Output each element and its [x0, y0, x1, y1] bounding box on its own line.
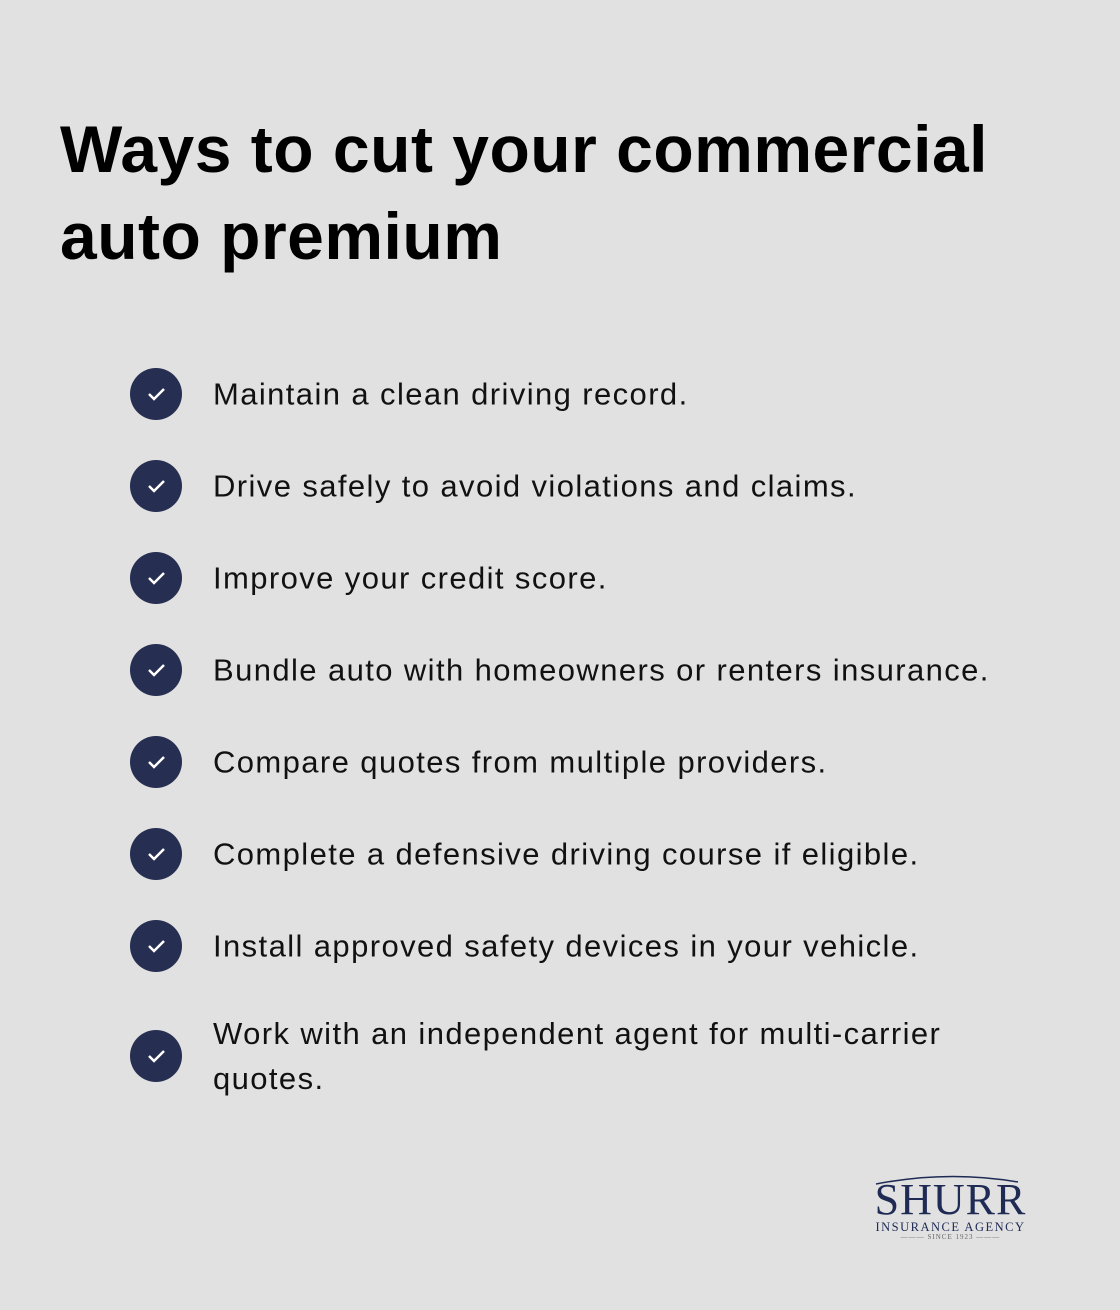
item 4 [130, 644, 990, 696]
item 1: Maintain a clean driving record. [213, 376, 689, 412]
logo: SHURR [875, 1175, 1026, 1224]
item 8 [130, 1016, 941, 1096]
item 2: Drive safely to avoid violations and claims. [213, 468, 857, 504]
item 6 [130, 828, 919, 880]
logo: ——— SINCE 1923 ——— [901, 1233, 1000, 1241]
item 5 [130, 736, 828, 788]
item 4: Bundle auto with homeowners or renters insurance. [213, 652, 990, 688]
title: Ways to cut your commercial [60, 112, 988, 186]
item 8: Work with an independent agent for multi-carrier [213, 1016, 941, 1051]
item 5: Compare quotes from multiple providers. [213, 744, 828, 780]
title: auto premium [60, 199, 502, 273]
item 7: Install approved safety devices in your vehicle. [213, 928, 919, 964]
item 7 [130, 920, 919, 972]
item 6: Complete a defensive driving course if eligible. [213, 836, 919, 872]
logo: INSURANCE AGENCY [875, 1220, 1026, 1234]
item 3: Improve your credit score. [213, 560, 608, 596]
item 3 [130, 552, 608, 604]
item 2 [130, 460, 857, 512]
title [60, 112, 988, 273]
item 1 [130, 368, 689, 420]
item 8: quotes. [213, 1061, 324, 1096]
